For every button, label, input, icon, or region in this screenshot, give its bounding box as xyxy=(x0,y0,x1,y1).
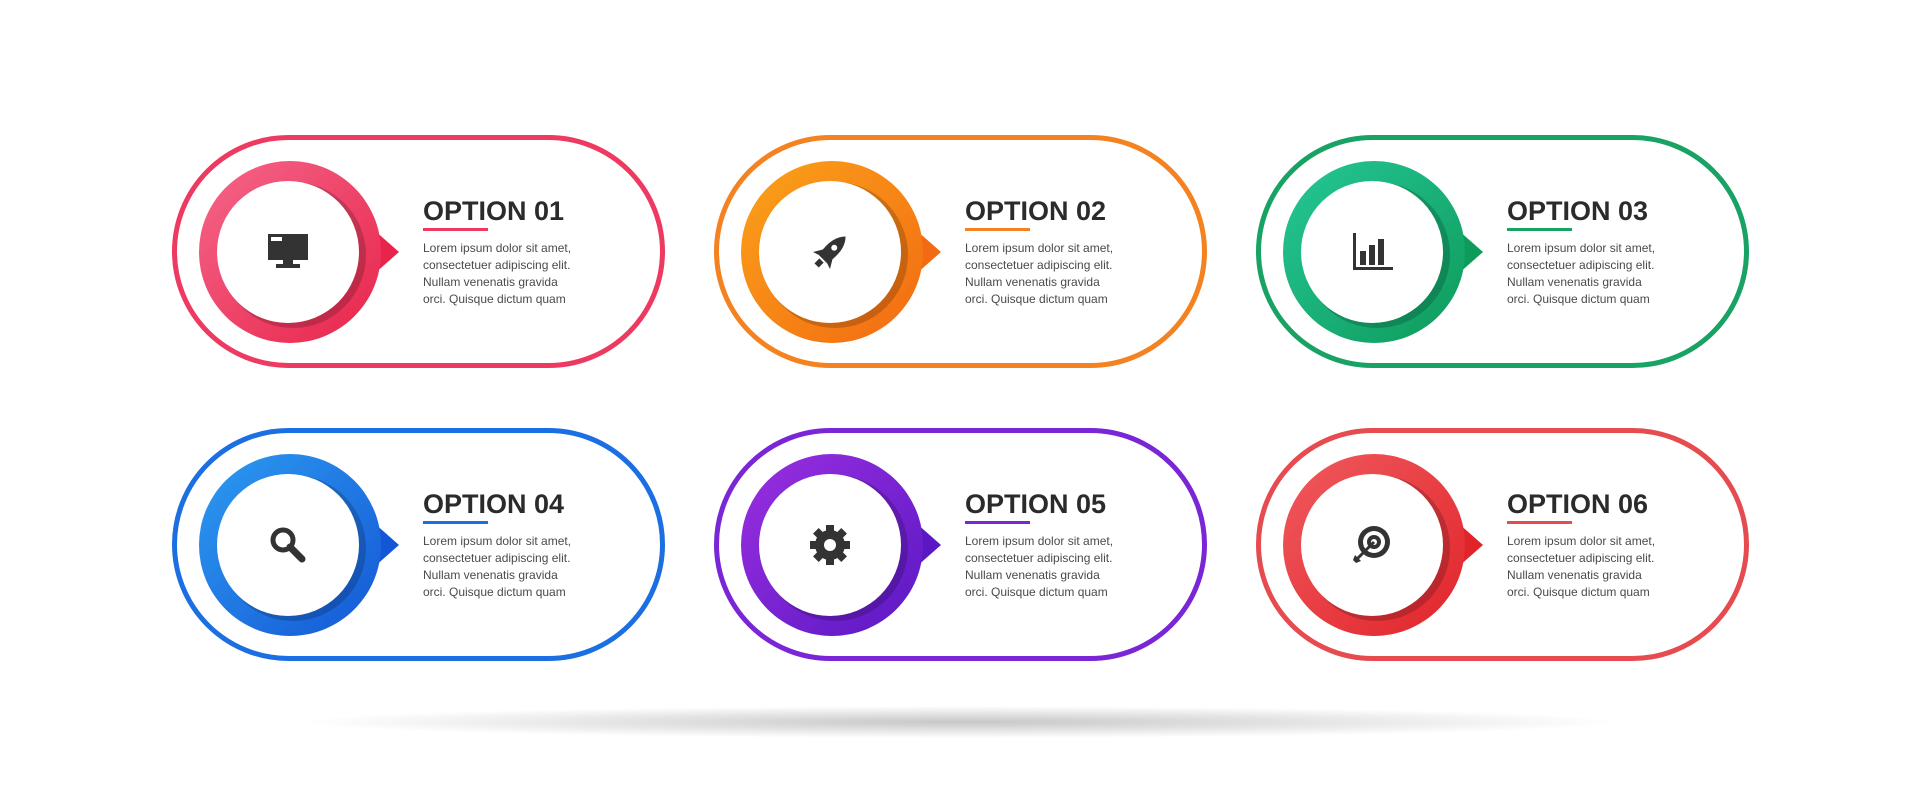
text block: Nullam venenatis gravida xyxy=(423,568,558,582)
text block: orci. Quisque dictum quam xyxy=(423,292,566,306)
text block: Lorem ipsum dolor sit amet, xyxy=(1507,241,1655,255)
icon: magnifier xyxy=(273,530,302,559)
icon: bar chart xyxy=(1353,233,1393,270)
panel: option 01 xyxy=(174,138,662,366)
icon: target xyxy=(1353,526,1390,563)
text block: consectetuer adipiscing elit. xyxy=(1507,258,1654,272)
text block: Lorem ipsum dolor sit amet, xyxy=(423,534,571,548)
panel: option 06 xyxy=(1258,430,1746,658)
text block: orci. Quisque dictum quam xyxy=(423,585,566,599)
text block: Nullam venenatis gravida xyxy=(965,275,1100,289)
text block: consectetuer adipiscing elit. xyxy=(423,258,570,272)
text block: orci. Quisque dictum quam xyxy=(965,585,1108,599)
text block: Nullam venenatis gravida xyxy=(1507,275,1642,289)
text block: Lorem ipsum dolor sit amet, xyxy=(423,241,571,255)
text block: Lorem ipsum dolor sit amet, xyxy=(965,534,1113,548)
text block: Nullam venenatis gravida xyxy=(965,568,1100,582)
panel: option 03 xyxy=(1258,138,1746,366)
panel: option 05 xyxy=(716,430,1204,658)
text block: Lorem ipsum dolor sit amet, xyxy=(1507,534,1655,548)
heading: OPTION 03 xyxy=(1507,196,1648,226)
text block: Lorem ipsum dolor sit amet, xyxy=(965,241,1113,255)
panel: option 04 xyxy=(174,430,662,658)
text block: Nullam venenatis gravida xyxy=(1507,568,1642,582)
text block: consectetuer adipiscing elit. xyxy=(423,551,570,565)
text block: orci. Quisque dictum quam xyxy=(965,292,1108,306)
floor shadow xyxy=(300,706,1620,738)
heading: OPTION 05 xyxy=(965,489,1106,519)
panel: option 02 xyxy=(716,138,1204,366)
icon: monitor xyxy=(268,234,308,268)
heading: OPTION 04 xyxy=(423,489,564,519)
heading: OPTION 06 xyxy=(1507,489,1648,519)
text block: orci. Quisque dictum quam xyxy=(1507,585,1650,599)
icon: gear xyxy=(810,525,850,565)
text block: consectetuer adipiscing elit. xyxy=(1507,551,1654,565)
heading: OPTION 01 xyxy=(423,196,564,226)
text block: orci. Quisque dictum quam xyxy=(1507,292,1650,306)
text block: consectetuer adipiscing elit. xyxy=(965,551,1112,565)
heading: OPTION 02 xyxy=(965,196,1106,226)
text block: consectetuer adipiscing elit. xyxy=(965,258,1112,272)
icon: rocket xyxy=(808,228,854,274)
text block: Nullam venenatis gravida xyxy=(423,275,558,289)
